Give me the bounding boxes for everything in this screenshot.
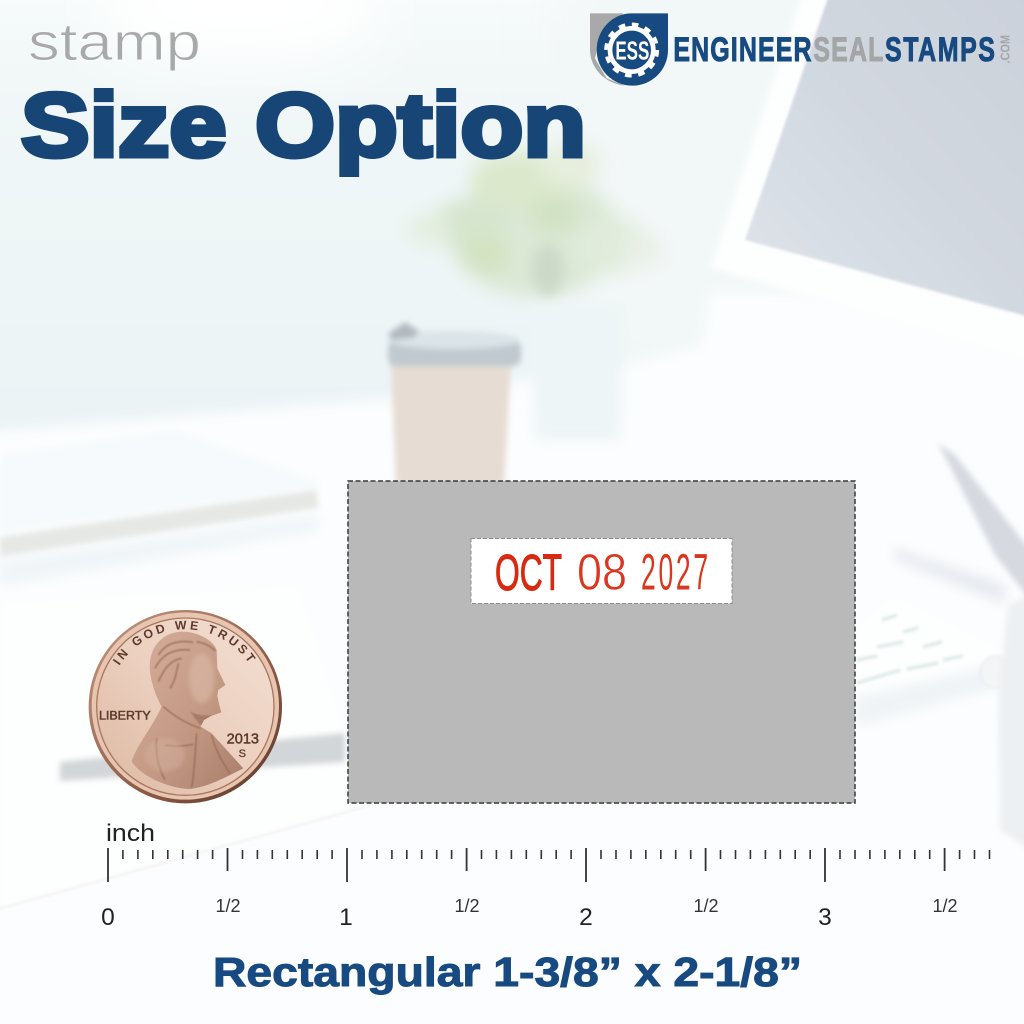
Lincoln coat highlight (145, 738, 185, 772)
paper sheet edge (0, 805, 370, 908)
notebook top (0, 430, 318, 532)
pen holder jar (998, 595, 1024, 850)
panel: stamp impression area (348, 481, 855, 803)
Lincoln bust (127, 628, 247, 792)
mint mark: S (239, 748, 246, 760)
logo word: seal: SEAL (813, 31, 883, 69)
pencil in jar (938, 443, 1024, 600)
ruler label 1: 1 (339, 904, 353, 931)
pen under penny (60, 733, 345, 781)
ruler label 0: 0 (101, 904, 115, 931)
logo gear (606, 24, 657, 76)
background wall (0, 0, 1024, 440)
white date band (471, 538, 732, 604)
logo shield (597, 13, 668, 86)
motto: IN GOD WE TRUST (112, 620, 256, 666)
ruler unit label: inch (106, 820, 155, 847)
second pen in jar (893, 548, 1005, 604)
year: 2013 (227, 730, 259, 747)
keyboard hinge (980, 656, 1012, 688)
date year: 2027 (641, 543, 708, 601)
plant stem shade (532, 244, 564, 296)
notebook shadow (0, 516, 318, 585)
coffee cup body (391, 362, 511, 485)
keyboard keys (857, 615, 963, 683)
Lincoln beard (190, 712, 219, 725)
Lincoln hair (155, 641, 215, 688)
subtitle: stamp: stamp (28, 13, 201, 72)
lower-left paper tone (0, 585, 370, 908)
logo initials: ESS (615, 35, 649, 65)
dimension caption: Rectangular 1-3/8” x 2-1/8” (213, 949, 802, 995)
logo word: stamps: STAMPS (885, 31, 995, 69)
gray stamp area (348, 481, 855, 803)
coffee cup lid (388, 322, 521, 366)
ruler label 1/2: 1/2 (932, 896, 958, 916)
keyboard shadow (856, 666, 1000, 726)
desk surface (0, 290, 1024, 1024)
ruler label 1/2: 1/2 (454, 896, 480, 916)
plant pot (530, 305, 625, 440)
Lincoln coat folds (156, 707, 230, 788)
date day: 08 (577, 544, 627, 600)
ruler half ticks (228, 848, 945, 871)
logo shield back (590, 13, 625, 86)
logo: Engineer Seal Stamps (590, 13, 1012, 86)
plant leaves (408, 143, 662, 297)
ruler (101, 820, 990, 931)
ruler label 1/2: 1/2 (693, 896, 719, 916)
Lincoln face highlight (189, 653, 214, 703)
icon: penny (88, 610, 282, 804)
keyboard (856, 595, 1005, 694)
date month: OCT (495, 544, 562, 601)
ruler label 3: 3 (818, 904, 832, 931)
ruler label 2: 2 (579, 904, 593, 931)
logo word: engineer: ENGINEER (673, 31, 812, 69)
logo suffix: .com: .COM (997, 35, 1012, 63)
penny face (97, 618, 274, 795)
title: Size Option: Size Option (21, 76, 586, 176)
ruler label 1/2: 1/2 (215, 896, 241, 916)
penny rim (89, 610, 282, 803)
monitor screen (745, 0, 1024, 317)
notebook spine (0, 490, 318, 557)
bright top window glow (90, 0, 390, 65)
liberty label: LIBERTY (99, 709, 151, 722)
ruler inch ticks (108, 848, 825, 882)
wall light on the right (570, 0, 870, 380)
ruler sixteenth ticks (123, 850, 989, 859)
monitor frame (710, 0, 1024, 368)
